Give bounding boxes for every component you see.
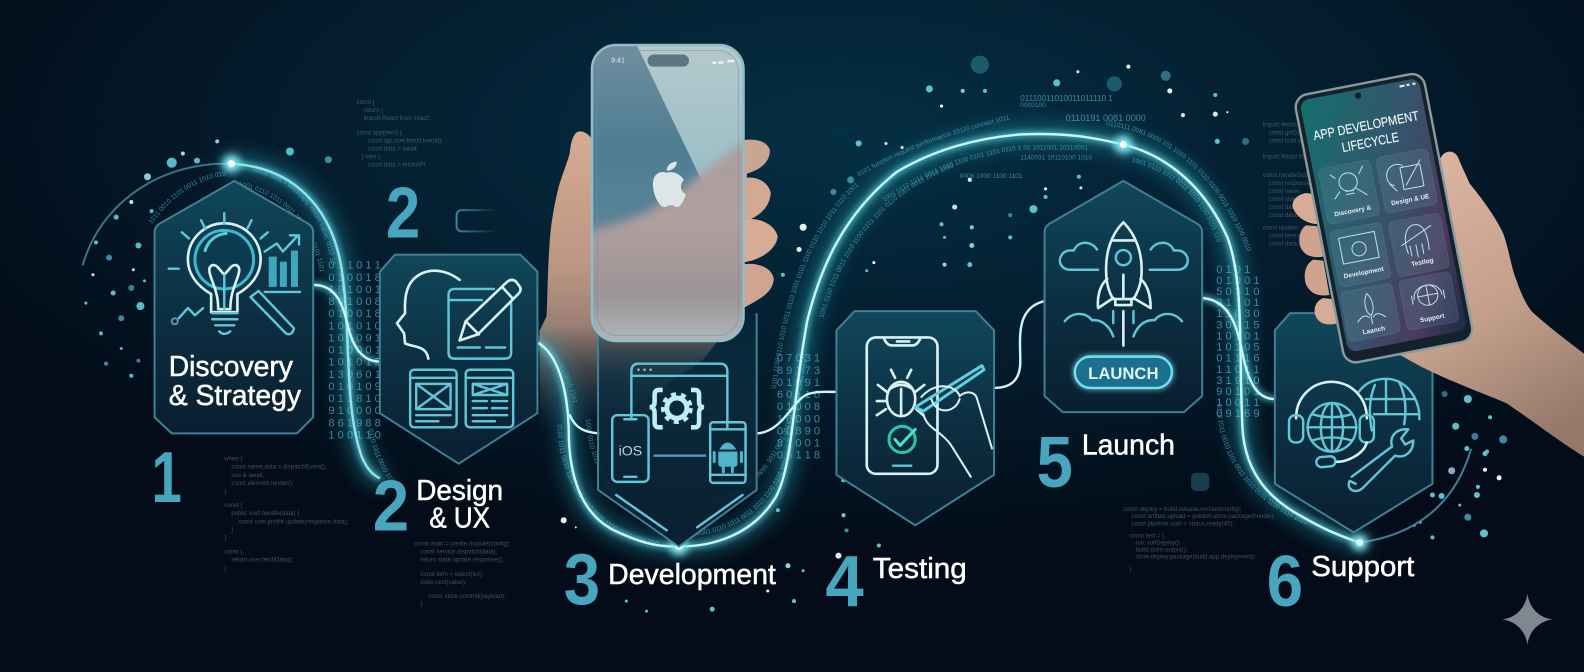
binary column after panel 1: 1 3 0 6 0 1 <box>328 369 381 381</box>
binary column after panel 1: 0 1 0 0 0 1 <box>328 345 381 357</box>
panel shape <box>598 313 757 547</box>
code block lower left: } <box>224 535 226 541</box>
label: 2 Design & UX: Design <box>416 474 503 506</box>
binary column after panel 5: 0 9 1 6 9 <box>1216 408 1260 420</box>
icon: light bulb with magnifier and chart <box>169 213 300 334</box>
phone body <box>1294 72 1474 365</box>
code block lower left: const user.profile.update(response.data); <box>238 519 349 525</box>
binary column after panel 5: 3 0 1 1 5 <box>1216 319 1260 331</box>
code block right: const data.user; <box>1269 213 1312 219</box>
screen <box>1299 78 1467 353</box>
code block lower left: use & await; <box>231 473 265 479</box>
code block under launch: const test = { <box>1129 533 1164 539</box>
wide glow <box>230 134 1360 547</box>
hand holding glass phone <box>539 131 778 430</box>
panel shape <box>1045 181 1202 412</box>
glowing nodes <box>222 135 1368 556</box>
code block lower left: return user.fetchData(); <box>231 558 294 564</box>
tile: testing <box>1388 213 1450 277</box>
faint arc entering at the left <box>83 164 230 265</box>
binary column after panel 1: 9 1 0 0 0 0 <box>328 405 381 417</box>
code block under design: const item = select(list); <box>420 572 484 578</box>
binary column after panel 5: 3 1 1 0 1 <box>1216 297 1260 309</box>
data strips following the glowing path: 0006 1000 1100 1101 <box>960 173 1023 180</box>
code block under launch: const pipeline.start = status.ready(45); <box>1131 521 1234 527</box>
step number 2 upper: 2 <box>386 172 420 253</box>
label: 5 Launch: 5 <box>1036 422 1073 503</box>
label: 4 Testing <box>825 541 967 622</box>
code block right: const item.map; <box>1269 233 1312 239</box>
code block top left: const api.user.fetchUser(id); <box>368 138 443 144</box>
code block lower left: when { <box>224 457 242 463</box>
dynamic island <box>648 55 689 67</box>
binary column after panel 1: 0 1 1 8 1 0 <box>328 393 381 405</box>
binary column after panel 5: 3 1 9 1 0 <box>1216 375 1260 387</box>
tile: launch <box>1340 283 1401 342</box>
inner edge <box>597 51 738 335</box>
label: 2 Design & UX: & UX <box>429 501 490 533</box>
narrow glow <box>230 134 1360 547</box>
straight data text near top arc: 01110011010011011110 1 <box>1020 94 1113 103</box>
tile: launch: Laanch <box>1362 325 1386 336</box>
code block under launch: build.store.output(); <box>1135 548 1188 554</box>
data strips following the glowing path: 0110 1011 0010 1101 0011 1010 0101 1100 0110 1010 1100 0101 <box>1217 404 1308 524</box>
binary column after panel 5: 1 1 0 3 0 <box>1216 308 1260 320</box>
tile: development: Development <box>1343 266 1385 280</box>
tile: discovery: Discovery & <box>1334 204 1372 218</box>
panel 4: testing <box>836 311 994 525</box>
code block lower left: } <box>231 527 233 533</box>
status icons <box>1400 83 1415 87</box>
data strips following the glowing path: 0101 function request performance 10110 connect 1011 remote 0110 1001 1101 <box>857 115 1010 176</box>
binary column after panel 1: 0 1 0 1 0 9 <box>328 381 381 393</box>
code block under launch: store.deploy.package(build.app.deployment); <box>1135 555 1256 561</box>
label: 2 Design & UX: 2 <box>373 465 409 546</box>
code block top left: import React from 'react'; <box>364 116 431 122</box>
code block top left: const { <box>357 100 375 106</box>
palm, thumb and wrist <box>1374 152 1584 457</box>
code block right: const state; <box>1269 197 1300 203</box>
panel 3: development <box>598 313 757 547</box>
tile: design: Design & UE <box>1391 193 1431 207</box>
code block lower left: const element.render(); <box>231 481 294 487</box>
code block under design: const main = create.module(config); <box>414 542 510 548</box>
panel shape <box>380 255 537 464</box>
binary column after panel 3: 0 6 1 1 8 <box>777 450 820 462</box>
phone outline <box>592 45 744 341</box>
code block right: const handleSubmit; <box>1263 173 1318 179</box>
data strips following the glowing path: 01 1011001 10110001 <box>1023 145 1088 152</box>
data strips following the glowing path: const data = fetch(api); return value; 0110 1011 0010 1101 0011 1010 <box>253 168 336 264</box>
label: Discovery & Strategy <box>169 350 302 411</box>
camera <box>1355 92 1362 99</box>
label: 6 Support: Support <box>1311 550 1414 582</box>
binary column after panel 1: 0 1 1 0 1 1 <box>328 260 381 272</box>
panel 6: support <box>1275 313 1432 532</box>
curved data text, left loop: 1011 0010 1101 0011 1010 0101 1100 0110 1010 <box>148 171 226 224</box>
particle dots: right cluster <box>1029 65 1507 539</box>
code block under launch: run: runDeploy(); <box>1135 541 1181 547</box>
data strips following the glowing path: 1001 0110 1011 0011 1010 1100 0101 1101 0110 1001 0110 <box>698 446 792 536</box>
data strips following the glowing path: 1140031 10110100 1010 <box>1020 155 1093 162</box>
android phone with lifecycle app <box>1294 72 1474 365</box>
label: 5 Launch: Launch <box>1082 429 1175 461</box>
launch button: LAUNCH <box>1088 364 1159 383</box>
label: Discovery & Strategy: & Strategy <box>169 379 302 411</box>
sparkle watermark <box>1502 594 1553 645</box>
code block right: const response; <box>1269 181 1312 187</box>
panel 1: discovery and strategy <box>155 181 313 433</box>
binary columns <box>328 260 1260 462</box>
fingers <box>741 140 778 308</box>
panel 5: launch <box>1045 181 1202 412</box>
fading arc at the right <box>1360 450 1471 542</box>
data strips following the glowing path: 1001 0110 1011 0011 1010 1100 0101 1101 0110 1001 0011 1010 1100 <box>819 163 954 318</box>
binary column after panel 1: 1 9 1 0 0 1 <box>328 284 381 296</box>
binary column after panel 5: 1 1 0 1 1 <box>1216 364 1260 376</box>
panel 2: design and UX <box>380 255 537 464</box>
icon: rocket with clouds <box>1060 222 1188 345</box>
binary column after panel 1: 0 1 0 0 1 8 <box>328 272 381 284</box>
code block lower left: const { <box>224 550 242 556</box>
code block under design: const store.commit(payload); <box>428 594 506 600</box>
binary column after panel 5: 0 1 1 1 6 <box>1216 353 1260 365</box>
icon: code braces, gear, iOS and Android devices <box>612 364 746 530</box>
icon: head profile with pencil and wireframes <box>397 271 521 427</box>
binary column after panel 5: 1 0 1 0 1 <box>1216 330 1260 342</box>
code block right: const getData(); <box>1269 130 1312 136</box>
launch button <box>1075 357 1172 388</box>
code block top left: const data = await; <box>368 147 419 153</box>
tile: support <box>1398 271 1460 331</box>
tile: support: Support <box>1419 312 1446 324</box>
tile: testing: Testlog <box>1411 257 1434 268</box>
binary column after panel 1: 0 1 0 0 1 8 <box>328 308 381 320</box>
data strips following the glowing path: 1001 0110 1011 0011 1010 1100 0101 1101 0110 1001 0110 1001 <box>586 420 623 504</box>
label: 3 Development: Development <box>608 558 776 590</box>
icon: headset, globes and wrench <box>1289 379 1419 491</box>
particle dots: centre cluster <box>561 56 1012 613</box>
label: 6 Support <box>1267 541 1414 622</box>
data strips following the glowing path: 1001 0110 1011 0011 1010 1100 0101 1101 0110 1001 <box>240 182 324 272</box>
label: 3 Development: 3 <box>564 539 600 620</box>
panel shape <box>1275 313 1432 532</box>
code block lower left: public void handle(data) { <box>231 511 299 517</box>
binary column after panel 5: 5 0 3 1 0 <box>1216 286 1260 298</box>
code block top left: const app(item) { <box>357 130 402 136</box>
binary column after panel 3: 8 1 0 0 1 <box>777 438 820 450</box>
code block top left: const data = fetchAPI; <box>368 163 427 169</box>
glass phone with apple logo <box>586 44 753 349</box>
code block right: const update; <box>1263 225 1299 231</box>
code block right: import fetchUser; <box>1263 122 1309 128</box>
code block top left: } else { <box>362 155 380 161</box>
label: 6 Support: 6 <box>1267 541 1303 622</box>
icon: apple logo <box>653 162 686 207</box>
label: 4 Testing: Testing <box>873 552 967 584</box>
code block right: const load.data; <box>1269 138 1312 144</box>
binary column after panel 3: 8 9 1 7 3 <box>777 365 820 377</box>
code block under launch: const artifact.upload = publish.store.package(bundle); <box>1131 514 1275 520</box>
code snippets <box>223 100 1318 608</box>
icon: phone with bug, checkmark and stylus hand <box>867 337 992 477</box>
label: 3 Development <box>564 539 776 620</box>
particle dots: left cluster <box>84 139 332 378</box>
binary column after panel 5: 9 0 1 0 1 <box>1216 386 1260 398</box>
palm and thumb <box>539 131 748 430</box>
binary column after panel 1: 1 0 1 0 1 0 <box>328 320 381 332</box>
label: 5 Launch <box>1036 422 1175 503</box>
step number 1: 1 <box>152 437 182 518</box>
app title: APP DEVELOPMENT <box>1312 108 1420 143</box>
data strips following the glowing path: 0110 1011 0010 1101 <box>546 346 578 403</box>
label: 4 Testing: 4 <box>825 541 864 622</box>
code block right: const data.api; <box>1269 205 1308 211</box>
binary column after panel 3: 1 0 0 0 0 <box>777 413 820 425</box>
binary column after panel 1: 8 6 1 9 8 8 <box>328 417 381 429</box>
lifecycle glow path <box>83 134 1471 547</box>
binary column after panel 5: 1 0 0 1 1 <box>1216 397 1260 409</box>
panel shape <box>155 181 313 433</box>
tile: discovery <box>1318 159 1380 225</box>
binary column after panel 5: 0 1 0 0 1 <box>1216 275 1260 287</box>
left fingers <box>1293 193 1338 324</box>
binary column after panel 3: 6 0 1 1 0 <box>777 389 820 401</box>
tile: design <box>1375 148 1438 214</box>
code block right: const value; <box>1269 189 1301 195</box>
data strips following the glowing path: const render = build(app); 1011 0101 0011 1100 0110 1010 1011 0110 1001 <box>707 354 806 503</box>
code block top left: return { <box>364 108 383 114</box>
code block lower left: } <box>224 566 226 572</box>
data strips following the glowing path: 0000100 <box>1020 102 1046 109</box>
code block lower left: } <box>224 489 226 495</box>
code block lower left: const { <box>224 503 242 509</box>
code block right: const data.set; <box>1269 241 1308 247</box>
curved data text, top arc: 0101 1100 0110 1010 1011 0110 1001 0101 1100 0110 1010 1011 0110 1001 <box>772 182 858 388</box>
icon: code braces, gear, iOS and Android devices: iOS <box>619 443 642 459</box>
binary column after panel 3: 0 1 0 9 1 <box>777 377 820 389</box>
code block right: import React from; <box>1263 155 1313 161</box>
app subtitle: LIFECYCLE <box>1341 129 1400 155</box>
curved data text, bottom loop: 0110 1011 0010 1101 0011 1010 0101 1100 0110 1010 0101 1100 0110 1010 1011 <box>558 424 658 544</box>
binary column after panel 5: 0 1 0 1 <box>1216 264 1250 276</box>
binary column after panel 3: 0 0 8 9 0 <box>777 425 820 437</box>
binary column after panel 1: 1 0 0 0 9 1 <box>328 332 381 344</box>
status icons <box>712 61 734 63</box>
code block under design: const service.dispatch(data); <box>420 550 498 556</box>
hand holding android phone <box>1293 152 1584 457</box>
bright core line <box>230 134 1360 547</box>
binary column after panel 1: 1 0 1 0 1 5 <box>328 357 381 369</box>
code block lower left: const name.data = dispatchEvent(); <box>231 465 327 471</box>
binary column after panel 1: 1 0 0 1 1 0 <box>328 429 381 441</box>
code block under design: return state.update.response(); <box>420 558 504 564</box>
code block under launch: } <box>1129 567 1131 573</box>
code block under launch: const deploy = build.release.version(config); <box>1123 507 1242 513</box>
binary column after panel 3: 0 1 0 0 8 <box>777 401 820 413</box>
glass layers <box>593 46 742 340</box>
status time: 9:41 <box>611 58 625 65</box>
data strips following the glowing path: 0110 1011 0010 1101 1100 <box>369 429 394 480</box>
data strips following the glowing path: 0110111 0081 0000 101 1010 1101 0110 0100 0011 1010 1100 0010 1101 10110 01010 110 <box>1106 120 1251 251</box>
data strips following the glowing path: 0110191 0081 0000 <box>1066 113 1146 123</box>
ghost rounded rectangles <box>457 210 1209 491</box>
label: Discovery & Strategy: Discovery <box>169 350 294 382</box>
binary column after panel 3: 0 7 0 3 1 <box>777 353 820 365</box>
code block under design: } <box>420 602 422 608</box>
binary column after panel 1: 8 0 1 0 0 8 <box>328 296 381 308</box>
label: 2 Design & UX <box>373 465 503 546</box>
data strips following the glowing path: 1001 0110 1011 0011 1010 1100 0101 1101 0110 1001 <box>1132 158 1222 242</box>
binary column after panel 5: 1 0 1 0 5 <box>1216 342 1260 354</box>
panel shape <box>836 311 994 525</box>
code block under design: state.next(value); <box>420 580 467 586</box>
tile: development <box>1329 222 1391 288</box>
data strips following the glowing path: 1001 0110 1011 0011 1010 1100 0101 1101 0110 1001 0011 1010 1100 0101 1001 <box>882 145 1022 202</box>
